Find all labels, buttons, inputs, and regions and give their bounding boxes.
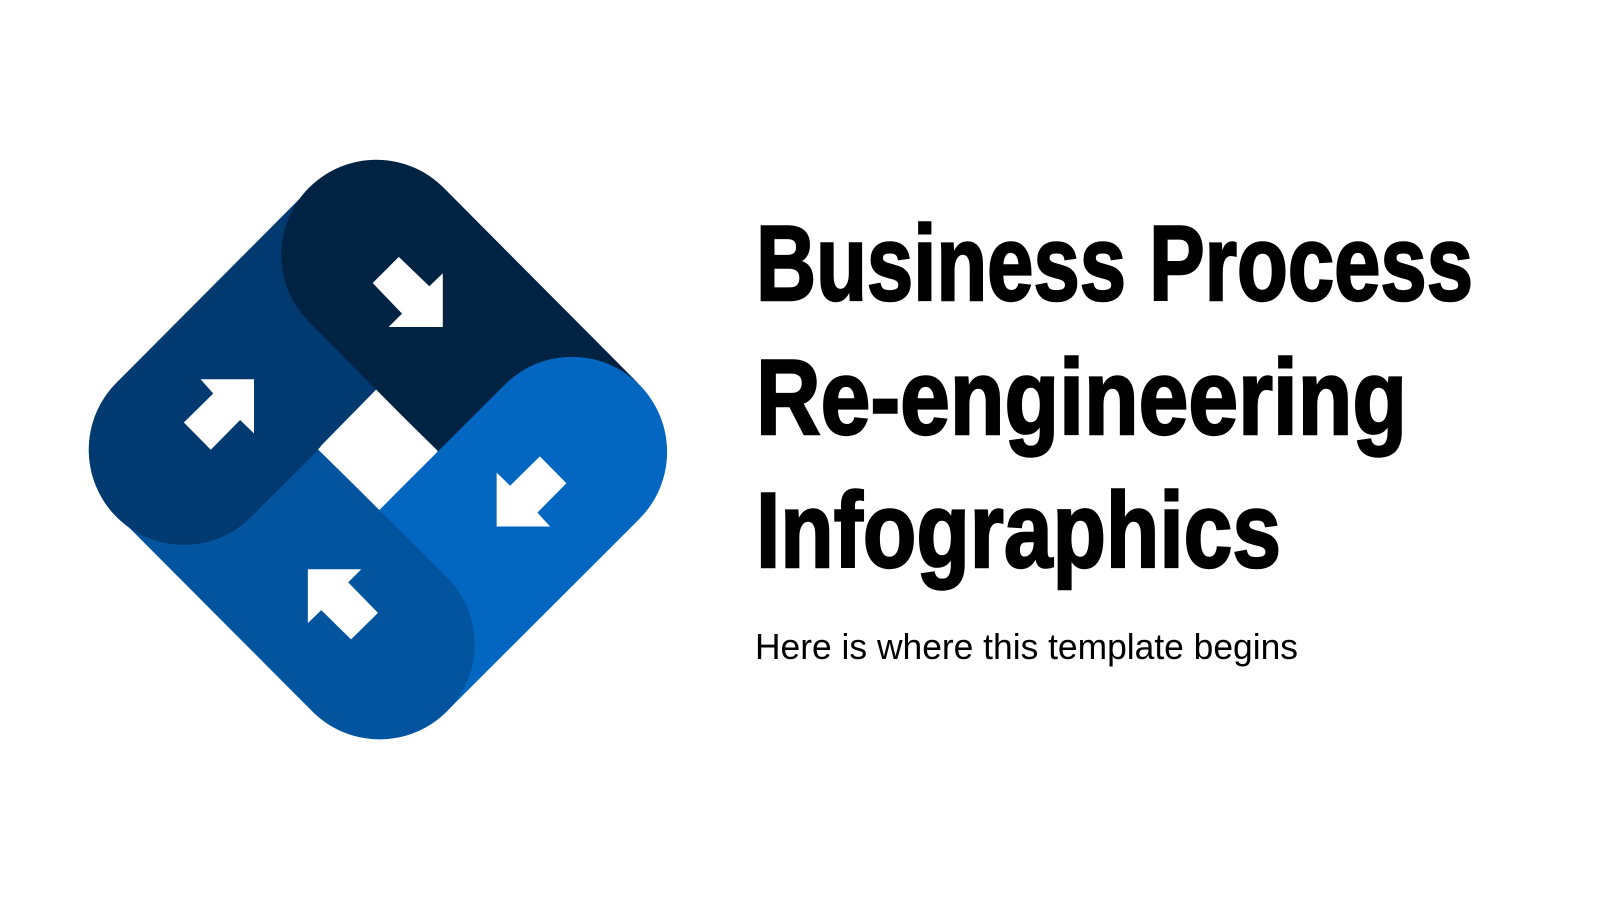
- band: navy top right: [281, 160, 638, 518]
- diagram: four interlocking arrow bands: [89, 160, 667, 739]
- icon: arrow pointing south-east: [373, 257, 443, 327]
- band: medium blue bottom: [120, 384, 475, 739]
- centre diamond: [318, 391, 438, 510]
- title line 2: Re-engineering: [756, 337, 1407, 457]
- band: dark blue left: [89, 186, 442, 545]
- icon: arrow pointing north-east: [184, 379, 254, 450]
- title: [756, 203, 1473, 590]
- subtitle: Here is where this template begins: [755, 626, 1298, 667]
- band: dark blue left cap overlapping the medium band: [89, 312, 321, 545]
- icon: arrow pointing north-west: [308, 569, 378, 639]
- icon: arrow pointing south-west: [497, 456, 566, 526]
- band: bright blue right: [313, 357, 667, 710]
- title line 3: Infographics: [756, 470, 1281, 590]
